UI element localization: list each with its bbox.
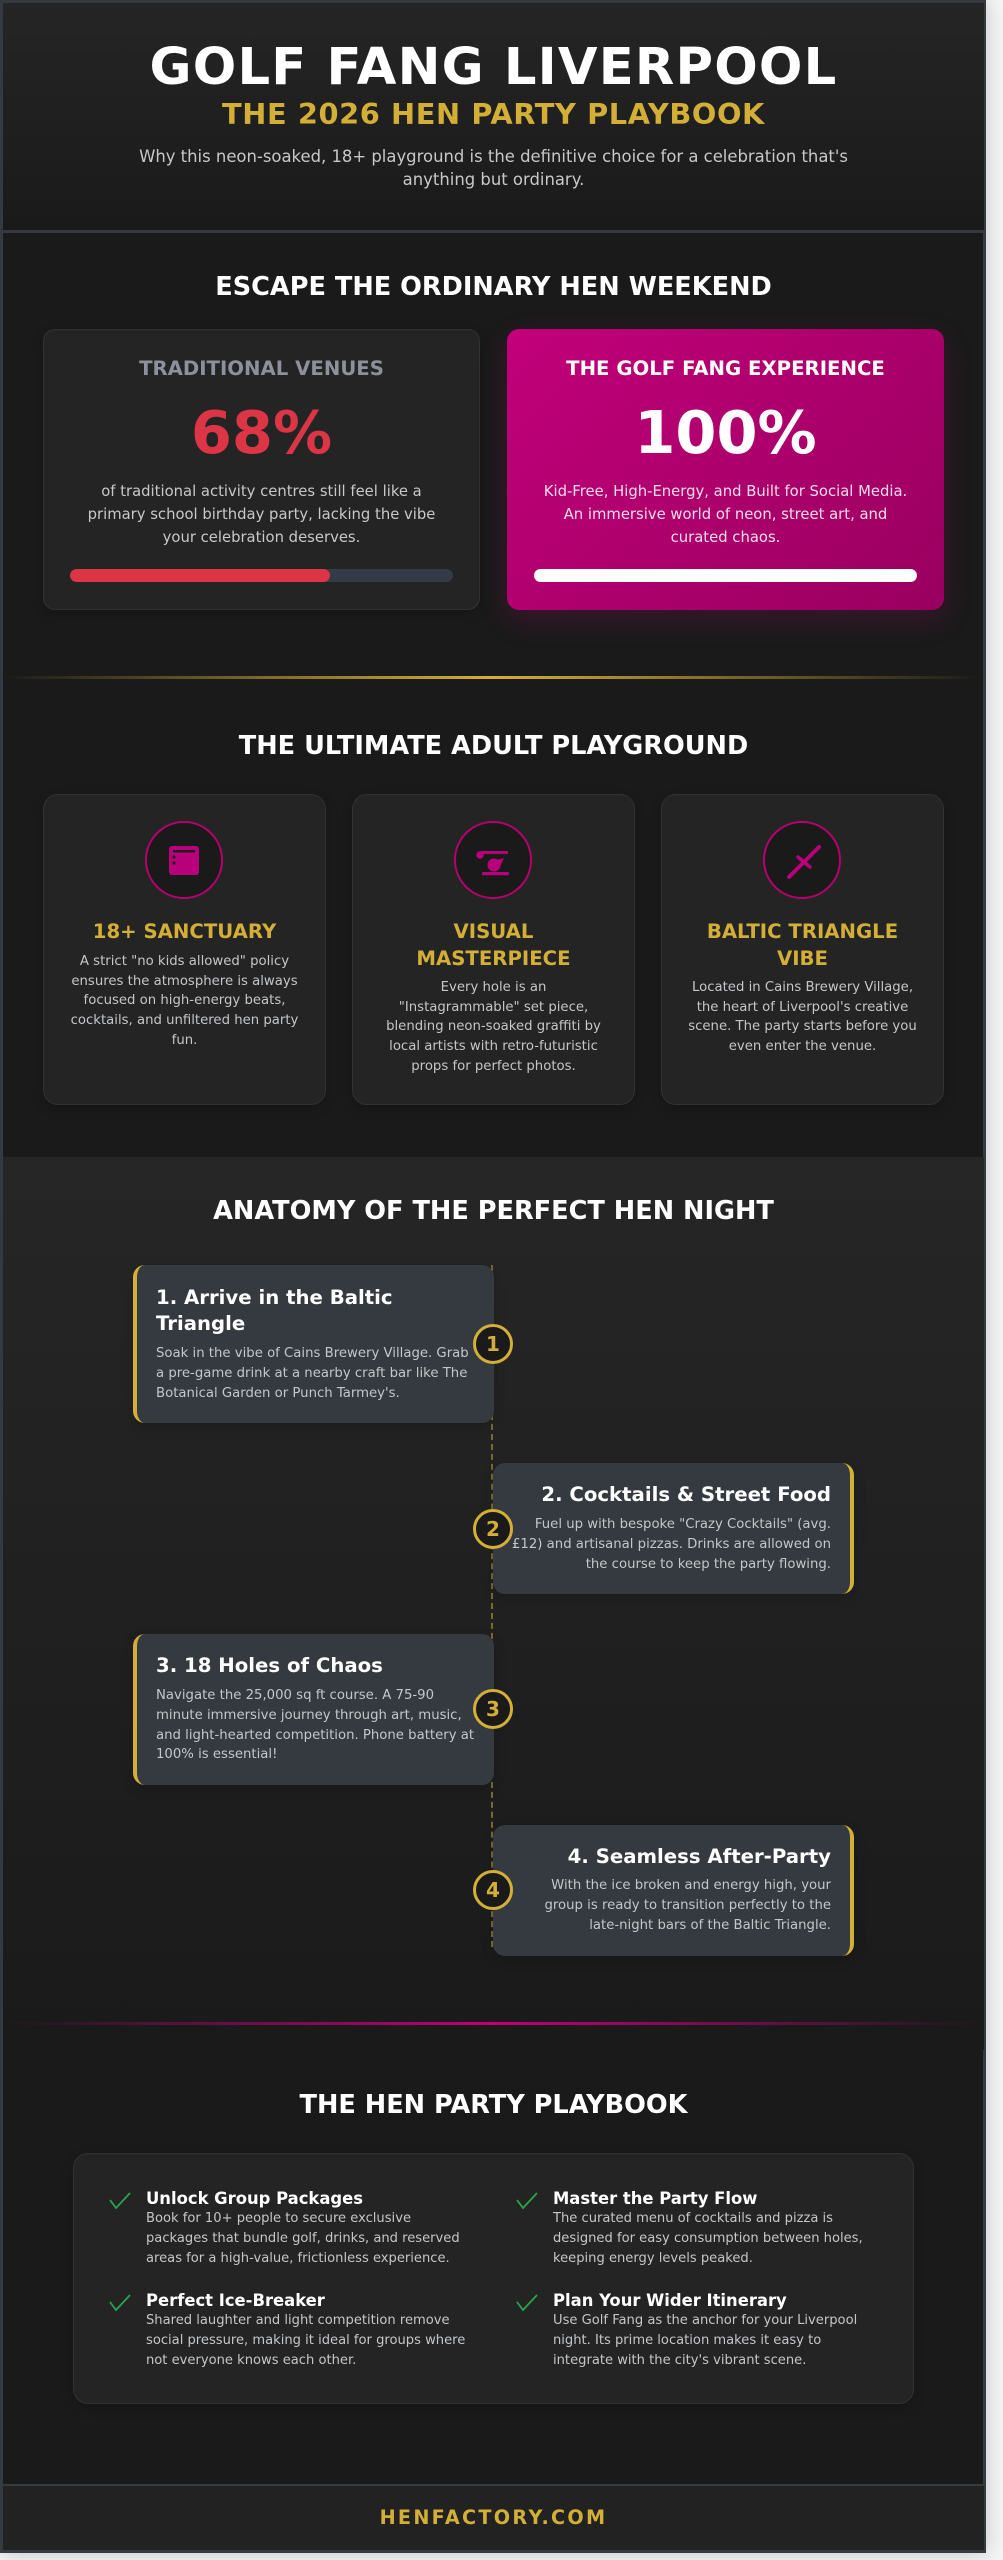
card text: visual masterpiece: blending neon-soaked graffiti by [386, 1019, 601, 1034]
tip: plan your wider itinerary [516, 2291, 857, 2368]
step 1 text [156, 1346, 469, 1401]
step 3 text: Navigate the 25,000 sq ft course. A 75-90 [156, 1688, 434, 1703]
step 3 text: minute immersive journey through art, music, [156, 1708, 462, 1723]
panel: traditional venues [43, 329, 480, 610]
heading: hen party playbook: THE HEN PARTY PLAYBOOK [300, 2090, 688, 2120]
description: traditional venues: of traditional activity centres still feel like a [101, 483, 422, 500]
icon: calendar-like card [145, 821, 223, 899]
tip text: designed for easy consumption between holes, [553, 2231, 863, 2246]
panel: golf fang experience [507, 329, 944, 610]
step 4 number: 4 [486, 1878, 500, 1902]
heading: escape the ordinary: ESCAPE THE ORDINARY HEN WEEKEND [215, 272, 772, 302]
card text: 18+ sanctuary: cocktails, and unfiltered hen party [71, 1013, 298, 1028]
progress bar: 68% [70, 569, 453, 582]
intro text: anything but ordinary. [403, 170, 584, 189]
tip text [553, 2313, 857, 2368]
tip title: Plan Your Wider Itinerary [553, 2291, 787, 2310]
step 3 title: 3. 18 Holes of Chaos [156, 1654, 383, 1677]
step 2 text [512, 1517, 831, 1572]
card text: visual masterpiece: Every hole is an [441, 980, 546, 995]
tip text: keeping energy levels peaked. [553, 2251, 753, 2266]
card heading: visual masterpiece: MASTERPIECE [416, 946, 571, 970]
description: traditional venues [88, 483, 435, 546]
progress bar: 100% [534, 569, 917, 582]
step 2 number: 2 [486, 1517, 500, 1541]
panel: timeline section background [3, 1157, 984, 2050]
card heading: 18+ sanctuary: 18+ SANCTUARY [93, 920, 276, 943]
step 4 text: group is ready to transition perfectly to the [544, 1898, 831, 1913]
description: golf fang experience: curated chaos. [671, 529, 780, 546]
description: golf fang experience: Kid-Free, High-Energy, and Built for Social Media. [544, 483, 907, 500]
card heading: baltic triangle vibe: VIBE [777, 946, 828, 970]
description: golf fang experience: An immersive world of neon, street art, and [564, 506, 887, 523]
card text: baltic triangle vibe: scene. The party starts before you [688, 1019, 917, 1034]
step 3 number [473, 1689, 513, 1729]
step 1 text: Soak in the vibe of Cains Brewery Village. Grab [156, 1346, 469, 1361]
tip text: areas for a high-value, frictionless experience. [146, 2251, 450, 2266]
card text: visual masterpiece: "Instagrammable" set piece, [399, 1000, 588, 1015]
tip title: Perfect Ice-Breaker [146, 2291, 325, 2310]
tip text: Shared laughter and light competition remove [146, 2313, 450, 2328]
step 4 text: With the ice broken and energy high, your [551, 1878, 831, 1893]
panel: baltic triangle vibe [661, 794, 944, 1105]
description: traditional venues: your celebration deserves. [163, 529, 360, 546]
tip text [146, 2211, 460, 2266]
tip text: not everyone knows each other. [146, 2353, 356, 2368]
step 4 number [473, 1870, 513, 1910]
card text: baltic triangle vibe: even enter the venue. [729, 1039, 876, 1054]
icon: check [109, 2192, 131, 2210]
step 4 [493, 1825, 854, 1956]
step 4 text [544, 1878, 831, 1933]
card heading: baltic triangle vibe: BALTIC TRIANGLE [707, 920, 898, 943]
card text: visual masterpiece: props for perfect photos. [411, 1059, 576, 1074]
step 3 text: and light-hearted competition. Phone battery at [156, 1728, 474, 1743]
tip title: Master the Party Flow [553, 2189, 757, 2208]
tip text: Book for 10+ people to secure exclusive [146, 2211, 411, 2226]
step 2 text: the course to keep the party flowing. [586, 1557, 831, 1572]
step 1 [133, 1265, 494, 1423]
icon: neon golf / spray [454, 821, 532, 899]
step 3 text [156, 1688, 474, 1762]
step 2 text: Fuel up with bespoke "Crazy Cocktails" (avg. [535, 1517, 831, 1532]
tip text [552, 2211, 863, 2266]
stat: 100%: 100% [634, 398, 817, 467]
card heading: visual masterpiece [416, 920, 571, 970]
icon: check [109, 2294, 131, 2312]
card text: visual masterpiece: local artists with retro-futuristic [389, 1039, 598, 1054]
step 1 number [473, 1324, 513, 1364]
title: GOLF FANG LIVERPOOL [150, 37, 837, 97]
tip text: Use Golf Fang as the anchor for your Liverpool [553, 2313, 857, 2328]
step 1 title: Triangle [156, 1312, 245, 1335]
card heading: baltic triangle vibe [707, 920, 898, 970]
step 2 [493, 1463, 854, 1594]
icon: check [516, 2294, 538, 2312]
subtitle: THE 2026 HEN PARTY PLAYBOOK [222, 97, 765, 131]
timeline dashed line [491, 1265, 493, 1947]
footer [3, 2484, 984, 2550]
tip title: Unlock Group Packages [146, 2189, 363, 2208]
step 4 text: late-night bars of the Baltic Triangle. [589, 1918, 831, 1933]
tip text: packages that bundle golf, drinks, and reserved [146, 2231, 460, 2246]
card text: 18+ sanctuary: focused on high-energy beats, [84, 993, 285, 1008]
step 3 text: 100% is essential! [156, 1747, 277, 1762]
tip text: night. Its prime location makes it easy to [553, 2333, 821, 2348]
card text: 18+ sanctuary: A strict "no kids allowed" policy [80, 954, 289, 969]
tip: perfect ice-breaker [109, 2291, 465, 2368]
icon: check [516, 2192, 538, 2210]
step 1 title [156, 1286, 393, 1335]
tip text [146, 2313, 465, 2368]
header panel [3, 3, 984, 233]
panel: 18+ sanctuary [43, 794, 326, 1105]
card text: 18+ sanctuary [71, 954, 298, 1048]
step 1 title: 1. Arrive in the Baltic [156, 1286, 393, 1309]
heading: anatomy of the perfect hen night: ANATOMY OF THE PERFECT HEN NIGHT [213, 1196, 774, 1226]
description: golf fang experience [544, 483, 907, 546]
card text: baltic triangle vibe [688, 980, 917, 1054]
card text: 18+ sanctuary: fun. [172, 1033, 197, 1048]
step 3 number: 3 [486, 1697, 500, 1721]
card heading: visual masterpiece: VISUAL [454, 920, 533, 943]
step 1 text: a pre-game drink at a nearby craft bar like The [156, 1366, 467, 1381]
footer link text: HENFACTORY.COM [380, 2506, 607, 2529]
icon: crossed tools [763, 821, 841, 899]
step 1 number: 1 [486, 1332, 500, 1356]
gold divider [3, 676, 984, 679]
step 2 title: 2. Cocktails & Street Food [541, 1483, 831, 1506]
description: traditional venues: primary school birthday party, lacking the vibe [88, 506, 435, 523]
stat: 68%: 68% [191, 398, 332, 467]
card text: visual masterpiece [386, 980, 601, 1074]
card text: 18+ sanctuary: ensures the atmosphere is always [71, 974, 298, 989]
magenta divider [3, 2022, 984, 2025]
panel: visual masterpiece [352, 794, 635, 1105]
tip: unlock group packages [109, 2189, 460, 2266]
tip text: The curated menu of cocktails and pizza is [553, 2211, 833, 2226]
intro text: Why this neon-soaked, 18+ playground is the definitive choice for a celebration that's [139, 147, 848, 166]
panel heading: golf fang experience: THE GOLF FANG EXPERIENCE [566, 357, 885, 380]
panel: playbook tips [73, 2153, 914, 2404]
step 4 title: 4. Seamless After-Party [568, 1845, 831, 1868]
heading: ultimate adult playground: THE ULTIMATE ADULT PLAYGROUND [239, 731, 748, 761]
card text: baltic triangle vibe: Located in Cains Brewery Village, [692, 980, 913, 995]
tip: master the party flow [516, 2189, 863, 2266]
card text: baltic triangle vibe: the heart of Liverpool's creative [697, 1000, 908, 1015]
step 2 text: £12) and artisanal pizzas. Drinks are allowed on [512, 1537, 831, 1552]
tip text: social pressure, making it ideal for groups where [146, 2333, 465, 2348]
tip text: integrate with the city's vibrant scene. [553, 2353, 806, 2368]
step 1 text: Botanical Garden or Punch Tarmey's. [156, 1386, 400, 1401]
panel heading: traditional venues: TRADITIONAL VENUES [139, 357, 384, 380]
intro text [139, 147, 848, 189]
step 3 [133, 1634, 494, 1785]
step 2 number [473, 1509, 513, 1549]
